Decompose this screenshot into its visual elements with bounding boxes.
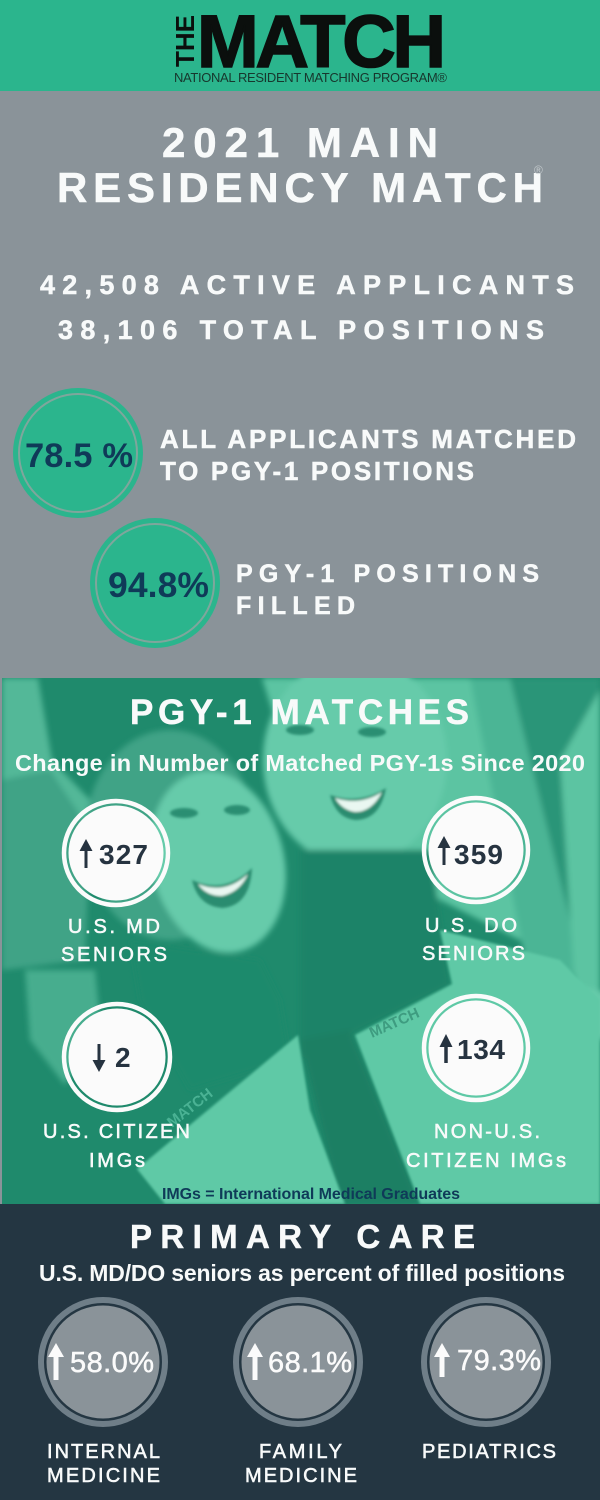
stat: U.S. citizen IMGs: 2 bbox=[115, 1042, 131, 1073]
stat: family medicine bbox=[236, 1300, 360, 1487]
stat: U.S. citizen IMGs: IMGs bbox=[89, 1150, 145, 1172]
stat: applicants matched: ALL APPLICANTS MATCHED bbox=[160, 424, 576, 454]
title: ® bbox=[534, 163, 543, 177]
headline counts: 42,508 ACTIVE APPLICANTS bbox=[40, 270, 574, 300]
papers bbox=[137, 1035, 345, 1204]
stat: internal medicine: INTERNAL bbox=[47, 1441, 160, 1463]
stat: U.S. MD seniors: U.S. MD bbox=[68, 916, 160, 938]
headline counts: 38,106 TOTAL POSITIONS bbox=[58, 315, 544, 345]
panel: PGY-1 matches photo background: MATCH bbox=[367, 1005, 422, 1042]
stat: internal medicine: MEDICINE bbox=[47, 1465, 160, 1487]
panel: header with logo bbox=[0, 0, 600, 91]
stat: U.S. MD seniors: 327 bbox=[99, 839, 148, 870]
stat: applicants matched bbox=[13, 388, 576, 518]
stat: U.S. citizen IMGs bbox=[43, 1004, 190, 1172]
stat: positions filled: FILLED bbox=[236, 592, 355, 620]
stat: applicants matched: TO PGY-1 POSITIONS bbox=[160, 456, 474, 486]
stat: applicants matched: 78.5 % bbox=[25, 437, 133, 475]
logo: The Match: NATIONAL RESIDENT MATCHING PROGRAM® bbox=[174, 70, 447, 85]
stat: U.S. MD seniors bbox=[61, 801, 168, 966]
faces bbox=[170, 725, 386, 908]
stat: family medicine: FAMILY bbox=[259, 1441, 342, 1463]
heading: PGY-1 matches: PGY-1 MATCHES bbox=[130, 693, 469, 732]
panel: PGY-1 matches photo background: MATCH bbox=[164, 1085, 216, 1131]
title bbox=[57, 119, 543, 211]
stat: positions filled bbox=[90, 518, 539, 648]
stat: internal medicine bbox=[41, 1300, 165, 1487]
panel: grey background bbox=[0, 91, 600, 678]
subheading: seniors percent: U.S. MD/DO seniors as percent of filled positions bbox=[39, 1260, 565, 1286]
stat: non-U.S. citizen IMGs bbox=[406, 996, 566, 1172]
logo: The Match: THE bbox=[170, 15, 200, 67]
panel: PGY-1 matches photo background bbox=[2, 655, 600, 1204]
subheading: change since 2020: Change in Number of Matched PGY-1s Since 2020 bbox=[15, 750, 585, 776]
stat: U.S. DO seniors bbox=[422, 798, 528, 965]
stat: U.S. DO seniors: 359 bbox=[454, 839, 503, 870]
stat: pediatrics: 79.3% bbox=[457, 1345, 541, 1377]
stat: positions filled: PGY-1 POSITIONS bbox=[236, 560, 539, 588]
stat: positions filled: 94.8% bbox=[108, 565, 209, 605]
stat: U.S. DO seniors: SENIORS bbox=[422, 943, 525, 965]
stat: non-U.S. citizen IMGs: 134 bbox=[457, 1034, 505, 1065]
stat: family medicine: MEDICINE bbox=[245, 1465, 357, 1487]
title: 2021 MAIN bbox=[162, 119, 438, 166]
logo: The Match: MATCH bbox=[197, 0, 446, 83]
stat: internal medicine: 58.0% bbox=[70, 1347, 154, 1379]
stat: non-U.S. citizen IMGs: NON-U.S. bbox=[434, 1121, 540, 1143]
stat: U.S. DO seniors: U.S. DO bbox=[425, 915, 517, 937]
stat: U.S. citizen IMGs: U.S. CITIZEN bbox=[43, 1121, 190, 1143]
headline counts bbox=[40, 270, 574, 345]
stat: pediatrics: PEDIATRICS bbox=[422, 1441, 556, 1463]
title: RESIDENCY MATCH bbox=[57, 164, 543, 211]
heading: primary care: PRIMARY CARE bbox=[130, 1218, 475, 1255]
panel: primary care bbox=[0, 1204, 600, 1500]
stat: pediatrics bbox=[422, 1300, 556, 1463]
stat: family medicine: 68.1% bbox=[268, 1347, 352, 1379]
stat: non-U.S. citizen IMGs: CITIZEN IMGs bbox=[406, 1150, 566, 1172]
footnote: IMG definition: IMGs = International Medical Graduates bbox=[162, 1186, 460, 1203]
stat: U.S. MD seniors: SENIORS bbox=[61, 944, 167, 966]
